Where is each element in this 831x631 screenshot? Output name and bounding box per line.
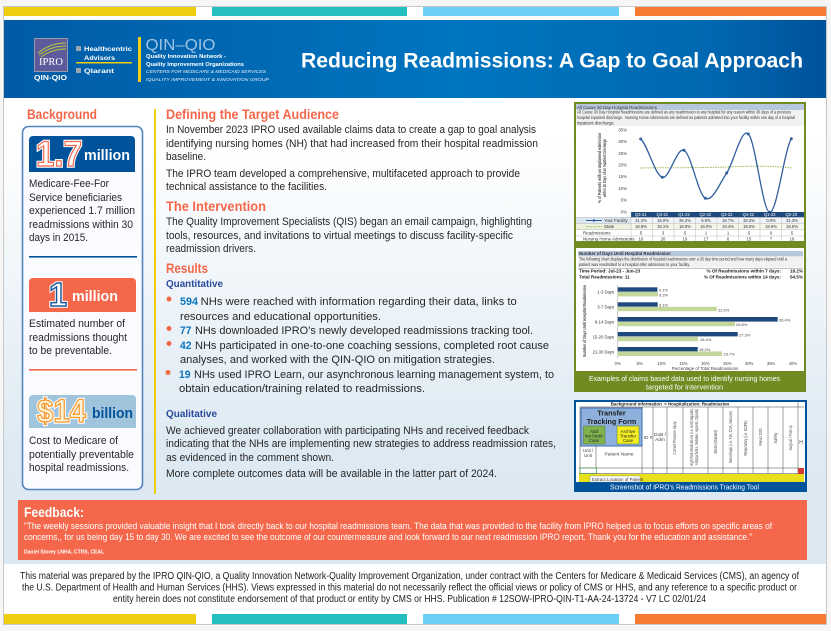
- bars: [618, 287, 778, 356]
- bar values: 9.2%: [659, 292, 669, 298]
- quote attribution: Daniel Storey LNHA, CTRS, CEAL: [24, 550, 105, 556]
- chart: days until readmission: % Of Readmissions within 14 days:: [704, 274, 781, 280]
- quantitative results list: 19: [179, 369, 190, 381]
- data table: 31.3%: [786, 218, 798, 223]
- text: preventable readmissions: Estimated number of: [29, 318, 125, 330]
- table column labels: Unit /: [583, 448, 594, 453]
- caption: claims data: Examples of claims based data used to identify nursing homes: [589, 374, 780, 383]
- text: cost to Medicare: potentially preventable: [29, 449, 134, 461]
- footer disclaimer: [4, 564, 826, 614]
- transfer tracking form: Case: [589, 438, 600, 443]
- section: Results: [166, 261, 556, 480]
- category labels: 8-14 Days: [595, 320, 614, 324]
- data table: 33.3%: [743, 218, 755, 223]
- stat: 1.7 million: 1.7: [36, 135, 82, 174]
- qualitative results: More complete outcomes data will be available in the latter part of 2024.: [166, 468, 497, 480]
- data table: 18.9%: [635, 224, 647, 229]
- partner names: Advisors: [84, 55, 115, 62]
- transfer tracking form: [581, 408, 642, 446]
- section: Defining the Target Audience: Defining the Target Audience: [166, 107, 339, 123]
- chart: all cause 30 day readmissions: % of Patients with an Unplanned Admission: [597, 133, 602, 203]
- panel: tracking tool screenshot: [574, 400, 807, 492]
- section: Results: Results: [166, 261, 208, 277]
- chart: days until readmission: Total Readmissions: 11: [579, 274, 630, 280]
- text: cost to Medicare: hospital readmissions.: [29, 462, 129, 474]
- tracking form screenshot: Background Information > Hospitalization: Readmission: [611, 402, 730, 406]
- x axis labels: 0%: [615, 361, 621, 366]
- data table: 7: [770, 236, 773, 242]
- table column labels: Renal / CKD: [758, 428, 763, 446]
- x axis labels: 20%: [701, 361, 710, 366]
- table column labels: [583, 408, 803, 466]
- data table: 26.3%: [679, 218, 691, 223]
- section: The Intervention: [166, 199, 532, 255]
- x axis labels: 40%: [789, 361, 797, 366]
- data table: 16: [790, 236, 795, 242]
- quantitative results list: 594: [180, 296, 199, 308]
- section: Defining the Target Audience: The IPRO team developed a comprehensive, multifaceted approach to provide: [166, 168, 520, 180]
- data table: 19.1%: [657, 224, 669, 229]
- yellow data row: [579, 468, 804, 482]
- data table: 18.5%: [786, 224, 798, 229]
- section: Defining the Target Audience: In November 2023 IPRO used available claims data to create a gap to goal analysis: [166, 124, 536, 136]
- partner names: [76, 46, 132, 75]
- qualitative results: [166, 409, 556, 480]
- qualitative results: indicating that the NHs are implementing new strategies to address readmission rates,: [166, 438, 556, 450]
- table column labels: Safety: [773, 432, 778, 444]
- heading: Background: Background: [27, 107, 97, 123]
- bar values: 27.3%: [739, 332, 751, 338]
- quantitative results list: analyses, and worked with the QIN-QIO on mitigation strategies.: [180, 354, 495, 366]
- chart: days until readmission: 18.2%: [790, 268, 803, 274]
- transfer tracking form: Transfer: [597, 408, 626, 418]
- QIN-QIO program text: [146, 37, 270, 83]
- title: Reducing Readmissions: A Gap to Goal Approach: [301, 48, 803, 72]
- data table: 1: [727, 230, 730, 236]
- table column labels: Respiratory (i.e. COPD): [743, 420, 748, 456]
- logo: IPRO QIN-QIO: IPRO: [39, 57, 63, 68]
- text: Medicare beneficiaries: experienced 1.7 million: [29, 205, 135, 217]
- text: cost to Medicare: [29, 435, 134, 474]
- footer disclaimer: entity herein does not constitute endorsement of that product or entity by CMS or HHS. Publication # 12SOW-IPRO-QIN-T1-AA-24-13724 - V7 LC 02/01/24: [113, 594, 706, 605]
- table column labels: Adm: [655, 437, 665, 443]
- section: The Intervention: The Intervention: [166, 199, 266, 215]
- bar values: [659, 288, 791, 356]
- data table: Q1-22: [678, 212, 690, 217]
- category labels: [593, 290, 614, 354]
- data table: Q4-22: [742, 212, 755, 217]
- table column labels: Unit: [584, 453, 593, 458]
- data table: 5.9%: [701, 218, 711, 223]
- y axis labels: 20%: [618, 162, 627, 168]
- text: Medicare beneficiaries: Service beneficiaries: [29, 192, 122, 204]
- table column labels: ID #: [644, 435, 653, 441]
- quantitative results list: [166, 279, 554, 395]
- data table: 31.3%: [635, 218, 647, 223]
- text: Medicare beneficiaries: Medicare-Fee-For: [29, 178, 109, 190]
- section: The Intervention: The Quality Improvement Specialists (QIS) began an email campaign, highlighting: [166, 216, 532, 228]
- transfer tracking form: New Transfer: [585, 434, 603, 438]
- quantitative results list: obtain education/training related to readmissions.: [179, 383, 425, 395]
- data table: 5: [748, 230, 751, 236]
- data table: Q3-21: [635, 212, 647, 217]
- data table: [576, 212, 804, 242]
- bar values: 22.6%: [718, 308, 730, 312]
- chart: days until readmission: The following chart displays the distribution of hospital readmissions over a 30 day time period and how many days elapsed until a: [579, 256, 787, 262]
- QIN-QIO program text: QIN–QIO: [146, 37, 216, 54]
- section: Defining the Target Audience: baseline.: [166, 151, 206, 163]
- chart: all cause 30 day readmissions: All Cause 30 Day Hospital Readmissions: [577, 105, 658, 110]
- tracking form screenshot: [576, 402, 805, 482]
- y axis labels: 15%: [618, 174, 627, 179]
- data table: Q2-22: [699, 212, 712, 217]
- bar values: 18.4%: [700, 337, 712, 342]
- panel: background statistics: [22, 107, 142, 490]
- logo: IPRO QIN-QIO: QIN-QIO: [34, 75, 68, 82]
- chart: days until readmission: patient was readmitted to a hospital after admission to your facility.: [579, 262, 690, 267]
- state line: [640, 166, 792, 168]
- QIN-QIO program text: Quality Improvement Organizations: [146, 62, 244, 68]
- stat: 1 million: 1: [49, 276, 67, 313]
- feedback quote: [24, 521, 773, 542]
- data table: 5: [791, 230, 794, 236]
- text: Medicare beneficiaries: days in 2015.: [29, 232, 88, 244]
- transfer tracking form: Archive: [621, 429, 636, 434]
- section: Defining the Target Audience: identifying nursing homes (NH) that had increased from their hospital readmission: [166, 138, 538, 150]
- chart: all cause 30 day readmissions: All Cause 30 Day Hospital Readmissions are defined as any readmission to any hospital for any reason within 30 days of a previous: [577, 110, 792, 114]
- quantitative results list: NHs downloaded IPRO’s newly developed readmissions tracking tool.: [195, 325, 533, 337]
- panel: feedback: [18, 500, 807, 560]
- bar values: 18.2%: [699, 347, 711, 352]
- bar values: 9.1%: [659, 302, 669, 308]
- bar values: 23.7%: [724, 352, 735, 356]
- quantitative results list: NHs used IPRO Learn, our asynchronous learning management system, to: [194, 369, 554, 381]
- data table: 3: [662, 230, 665, 236]
- qualitative results: We achieved greater collaboration with participating NHs and received feedback: [166, 425, 529, 437]
- y axis labels: 10%: [618, 186, 627, 191]
- chart: days until readmission: [576, 248, 804, 371]
- facility line: [641, 133, 791, 212]
- caption: claims data: [589, 374, 780, 392]
- table column labels: H: [799, 440, 803, 446]
- data table: Q1-23: [764, 212, 776, 217]
- quantitative results list: 77: [180, 325, 192, 337]
- text: cost to Medicare: Cost to Medicare of: [29, 435, 118, 447]
- stat: $14 billion: [29, 393, 136, 429]
- stat: 1.7 million: 1.7: [36, 135, 82, 174]
- text: Medicare beneficiaries: [29, 178, 135, 244]
- data table: 1: [705, 230, 708, 236]
- text: preventable readmissions: to be preventable.: [29, 345, 112, 357]
- x axis labels: 15%: [679, 361, 688, 366]
- table column labels: DoB /: [654, 432, 667, 438]
- y axis labels: 0%: [621, 210, 627, 214]
- y axis labels: 25%: [618, 151, 627, 156]
- transfer tracking form: Add: [590, 429, 598, 434]
- chart: days until readmission: Time Period: Jul-23 - Jun-23: [579, 268, 641, 274]
- chart: all cause 30 day readmissions: within 30 Days of an Inpatient Discharge: [602, 139, 607, 198]
- x axis labels: 10%: [657, 361, 666, 366]
- stat: 1 million: [29, 276, 136, 313]
- table column labels: Patient Name: [604, 452, 634, 458]
- table column labels: High Risk Medications (i.e. Anticoagulant,: [689, 408, 694, 466]
- chart: all cause 30 day readmissions: inpatient discharge.: [577, 120, 615, 126]
- chart: days until readmission: Number of Days Until Hospital Readmission: [582, 285, 587, 357]
- data table: 17: [704, 236, 709, 242]
- section: The Intervention: readmission drivers.: [166, 243, 256, 255]
- y axis labels: 5%: [621, 198, 627, 202]
- data table: 19.6%: [743, 224, 755, 229]
- table column labels: Antipsychotics, Sedative, Hypnotic, Opioids): [694, 409, 699, 465]
- feedback quote: concerns,, for us being day 15 to day 30. We are excited to see the outcome of our countermeasure and look forward to our next readmission IPRO report. Thank you for the education and assistance.”: [24, 532, 752, 542]
- chart: days until readmission: % Of Readmissions within 7 days:: [706, 268, 781, 274]
- data table: Q4-21: [656, 212, 669, 217]
- partner names: Healthcentric: [84, 46, 132, 53]
- feedback quote: “The weekly sessions provided valuable insight that I took directly back to our hospital readmissions team. The data that was provided to the facility from IPRO helped us to focus efforts on specific areas of: [24, 521, 773, 531]
- data table: 19: [683, 236, 688, 242]
- QIN-QIO program text: CENTERS FOR MEDICARE & MEDICAID SERVICES: [146, 69, 267, 75]
- text: preventable readmissions: [29, 318, 127, 357]
- caption: tracking tool: Screenshot of IPRO’s Readmissions Tracking Tool: [610, 484, 759, 492]
- stat: $14 billion: $14: [37, 393, 86, 429]
- data table: 0: [770, 230, 773, 236]
- main background: [4, 98, 826, 564]
- y axis labels: 30%: [618, 139, 627, 144]
- quantitative results list: 42: [180, 340, 192, 352]
- data table: 15: [747, 236, 752, 242]
- stat: $14 billion: $14: [37, 393, 86, 429]
- logo: IPRO QIN-QIO: [34, 38, 68, 82]
- yellow data row: Extract Location of Patient: [592, 477, 644, 482]
- data table: Your Facility: [604, 218, 629, 223]
- stat: 1.7 million: [29, 135, 135, 174]
- qualitative results: as evidenced in the comment shown.: [166, 452, 334, 464]
- stat: $14 billion: billion: [92, 406, 133, 422]
- data table: 19.4%: [722, 224, 734, 229]
- text: preventable readmissions: readmissions thought: [29, 332, 127, 344]
- quantitative results list: Quantitative: [166, 279, 223, 290]
- top colour bars: [4, 7, 826, 16]
- data table: 19.0%: [700, 224, 712, 229]
- x axis labels: 35%: [767, 361, 776, 366]
- QIN-QIO program text: Quality Innovation Network -: [146, 54, 226, 60]
- quantitative results list: resources and educational opportunities.: [180, 311, 381, 323]
- data table: 15.0%: [657, 218, 669, 223]
- y axis labels: 35%: [618, 128, 627, 132]
- table column labels: Current Pressure Injury: [672, 421, 677, 454]
- table column labels: Surgical / Post-op: [788, 425, 793, 450]
- data table: Q2-23: [785, 212, 798, 217]
- quantitative results list: NHs participated in one-to-one coaching sessions, completed root cause: [195, 340, 549, 352]
- text: Medicare beneficiaries: readmissions within 30: [29, 219, 133, 231]
- data table: 5: [640, 230, 643, 236]
- partner names: Qlarant: [84, 68, 115, 75]
- bar values: 26.8%: [736, 322, 748, 327]
- x axis labels: 30%: [745, 361, 754, 366]
- chart: all cause 30 day readmissions: hospital inpatient discharge. Nursing Home Admissions are defined as patients admitted into your facility within one day of a hospital: [577, 115, 795, 120]
- stat: 1 million: 1: [49, 276, 67, 313]
- chart: days until readmission: 54.5%: [790, 274, 803, 280]
- data table: State: [604, 224, 615, 229]
- data table: 5: [684, 230, 687, 236]
- section: The Intervention: tools, resources, and invitations to virtual meetings to discuss facility-specific: [166, 230, 513, 242]
- bar values: 36.4%: [779, 318, 791, 322]
- data table: 16: [639, 236, 644, 242]
- transfer tracking form: Tracking Form: [587, 417, 636, 426]
- header banner: [4, 20, 826, 98]
- chart: days until readmission: Percentage of Total Readmissions: [672, 366, 739, 371]
- y axis labels: [618, 128, 627, 214]
- data table: 16.7%: [722, 218, 734, 223]
- x axis labels: 25%: [723, 361, 732, 366]
- panel: claims data examples: [574, 102, 806, 392]
- category labels: 3-7 Days: [597, 304, 614, 310]
- data table: Nursing Home Admissions: [583, 236, 635, 242]
- stat: 1.7 million: million: [84, 148, 130, 164]
- data table: 20: [661, 236, 666, 242]
- category labels: 1-3 Days: [597, 290, 614, 294]
- table column labels: Infection (Diabetes): [713, 430, 718, 454]
- category labels: 15-20 Days: [593, 334, 614, 340]
- bar values: 9.1%: [659, 288, 669, 292]
- bottom colour bars: [4, 614, 826, 624]
- section: Defining the Target Audience: [166, 107, 538, 193]
- chart: days until readmission: Number of Days Until Hospital Readmission: [579, 251, 671, 256]
- data table: 0.0%: [766, 218, 776, 223]
- x axis labels: [615, 361, 797, 366]
- transfer tracking form: Transfer: [620, 434, 637, 438]
- data table: Q3-22: [721, 212, 733, 217]
- quantitative results list: NHs were reached with information regarding their data, links to: [201, 296, 517, 308]
- data table: 18.9%: [679, 224, 691, 229]
- data table: 19.6%: [765, 224, 777, 229]
- feedback heading: Feedback:: [24, 505, 84, 520]
- stat: 1 million: million: [72, 289, 118, 305]
- section: Defining the Target Audience: technical assistance to the facilities.: [166, 181, 327, 193]
- x axis labels: 5%: [637, 361, 643, 366]
- QIN-QIO program text: IQUALITY IMPROVEMENT & INNOVATION GROUP: [146, 77, 270, 83]
- transfer tracking form: Case: [623, 438, 634, 443]
- chart: all cause 30 day readmissions: [576, 104, 804, 242]
- caption: claims data: targeted for intervention: [646, 382, 723, 392]
- data table: 6: [727, 236, 730, 242]
- qualitative results: Qualitative: [166, 409, 217, 420]
- data table: Readmissions: [583, 230, 611, 236]
- category labels: 21-30 Days: [593, 350, 614, 354]
- table column labels: Neurologic (i.e. TIA, CVA, Seizure): [728, 411, 733, 463]
